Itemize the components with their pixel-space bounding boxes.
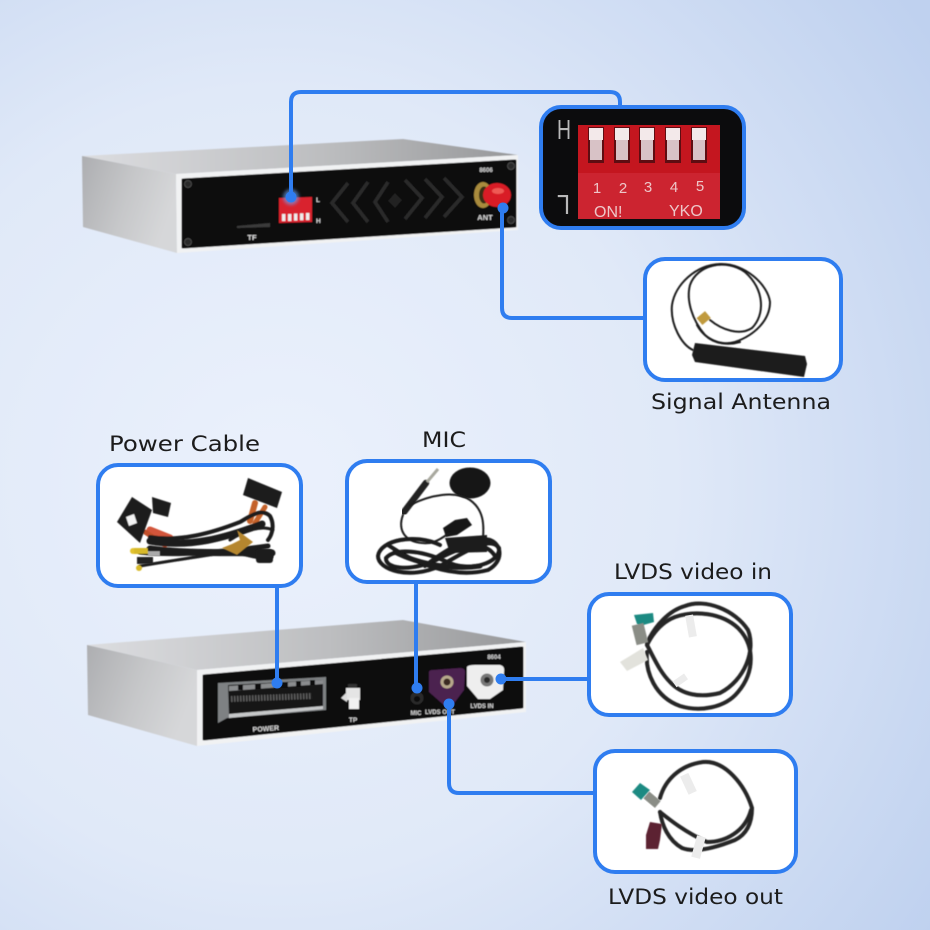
- connector line: LVDS video in: [496, 674, 590, 684]
- switch numbers: [593, 178, 704, 197]
- MIC jack: MIC: [410, 711, 422, 717]
- TP connector: [341, 684, 360, 724]
- screws: [184, 162, 514, 246]
- panel: LVDS video in: [589, 594, 791, 715]
- panel: signal antenna: [645, 259, 841, 380]
- switch numbers: 5: [696, 178, 704, 195]
- connector line: LVDS video out: [444, 698, 595, 793]
- switch brand text: [594, 203, 703, 221]
- LVDS in connector: 8604: [487, 655, 501, 661]
- switch numbers: 4: [670, 179, 678, 196]
- cable loops: [660, 762, 752, 850]
- switch numbers: 2: [619, 180, 627, 197]
- mic cable coil: [378, 495, 500, 573]
- panel: power cable: [98, 465, 301, 586]
- TF card slot: [237, 223, 270, 242]
- caption: Power Cable: Power Cable: [109, 432, 260, 456]
- connector line: MIC: [412, 582, 422, 694]
- panel: MIC: [347, 461, 550, 582]
- connector line: signal antenna: [498, 202, 645, 318]
- mic jack plug: [404, 469, 438, 512]
- white connector: [620, 648, 648, 671]
- switch brand text: YKO: [669, 203, 703, 220]
- vent chevrons: [332, 178, 462, 222]
- H and L marks: L: [557, 189, 570, 220]
- purple connector: [646, 822, 662, 849]
- switch numbers: 1: [593, 180, 601, 197]
- antenna cable: [672, 264, 770, 350]
- antenna connector: [474, 168, 511, 222]
- cable tags: [685, 614, 697, 638]
- LVDS in connector: [467, 655, 504, 710]
- LVDS out connector: LVDS OUT: [425, 710, 455, 716]
- connector line: DIP switch callout: [283, 92, 620, 205]
- H and L marks: [557, 114, 571, 220]
- power connector: [218, 677, 326, 734]
- harness yellow band: [222, 530, 253, 555]
- harness wires: [140, 503, 273, 566]
- teal connector: [632, 783, 650, 800]
- caption: LVDS video out: LVDS video out: [608, 885, 783, 909]
- RCA plugs: [130, 548, 273, 571]
- power connector: POWER: [252, 725, 279, 734]
- harness small connector: [152, 497, 171, 517]
- device: rear unit with power and LVDS ports: [87, 620, 526, 746]
- teal connector: [634, 613, 654, 626]
- harness large connector: [243, 478, 282, 508]
- cable loops: [647, 603, 751, 709]
- H and L marks: H: [557, 114, 571, 145]
- caption: LVDS video in: LVDS video in: [614, 560, 772, 584]
- small DIP switch: L: [316, 197, 320, 204]
- panel: DIP switch close-up: [541, 107, 744, 228]
- mic clip: [443, 518, 472, 537]
- harness box connector: [117, 497, 152, 543]
- small DIP switch: [279, 197, 321, 225]
- switch brand text: ON!: [594, 204, 622, 221]
- antenna connector: 8606: [479, 168, 493, 174]
- caption: MIC: MIC: [422, 428, 466, 452]
- TF card slot: TF: [247, 233, 257, 242]
- antenna connector: ANT: [477, 213, 493, 222]
- MIC jack: [410, 692, 424, 717]
- device: front unit with DIP switch and antenna port: [82, 139, 518, 253]
- switch numbers: 3: [644, 179, 652, 196]
- connector line: power cable: [272, 586, 282, 688]
- TP connector: TP: [349, 717, 358, 724]
- caption: Signal Antenna: Signal Antenna: [651, 390, 831, 414]
- LVDS in connector: LVDS IN: [470, 704, 494, 710]
- antenna bar: [692, 343, 807, 377]
- small DIP switch: H: [316, 218, 321, 225]
- LVDS out connector: [425, 668, 465, 716]
- panel: LVDS video out: [595, 751, 796, 872]
- mic foam head: [450, 468, 490, 498]
- cable tags: [680, 773, 697, 795]
